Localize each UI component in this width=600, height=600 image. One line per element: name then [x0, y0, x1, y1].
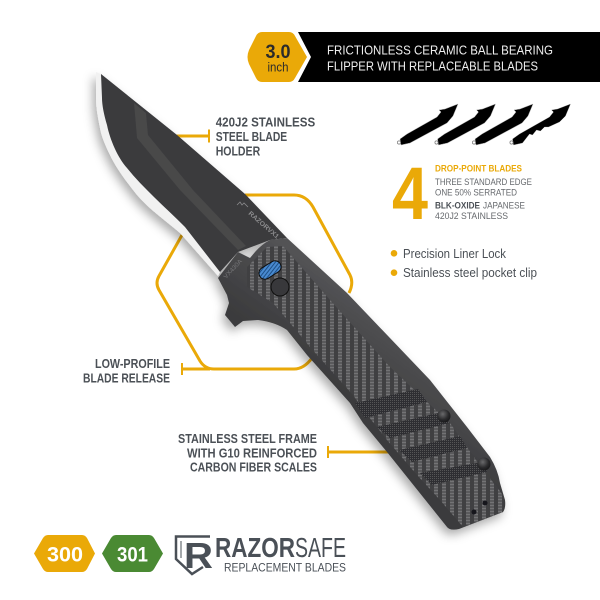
- replacement blade icons: [397, 104, 570, 145]
- label: blade holder: 420J2 STAINLESS: [216, 116, 315, 130]
- feature bullet: pocket clip: Stainless steel pocket clip: [403, 266, 537, 280]
- size badge: 3.0 inch: 3.0: [266, 41, 291, 63]
- blade specification text: 420J2 STAINLESS: [435, 211, 508, 221]
- label: blade release: [83, 357, 170, 386]
- label: frame and scales: STAINLESS STEEL FRAME: [178, 432, 317, 446]
- blade bevel: [134, 103, 246, 250]
- blade specification text: BLK-OXIDE: [435, 201, 480, 211]
- blade white edge: [96, 72, 222, 276]
- badge: 301: 301: [117, 544, 148, 566]
- blade: [101, 74, 287, 272]
- size badge: 3.0 inch: inch: [268, 60, 289, 74]
- handle: [218, 238, 505, 530]
- label: blade holder: HOLDER: [216, 144, 260, 158]
- logo wordmark: RAZOR: [215, 532, 295, 563]
- callout line: frame: [328, 446, 390, 458]
- callout line: blade holder: [175, 130, 209, 142]
- label: blade holder: [216, 116, 315, 158]
- gold hexagon callout: blade release: [157, 195, 352, 375]
- blade icon 2: [435, 104, 496, 145]
- blade logo mark: [237, 202, 248, 207]
- frame screws: [438, 410, 490, 470]
- blade specification text: ONE 50% SERRATED: [435, 188, 517, 198]
- blade specification text: [435, 164, 532, 221]
- carbon fiber scale: [247, 246, 504, 527]
- badge: 301: [102, 535, 163, 572]
- label: frame and scales: CARBON FIBER SCALES: [190, 461, 317, 475]
- header banner: FRICTIONLESS CERAMIC BALL BEARING: [327, 42, 553, 58]
- blade specification text: THREE STANDARD EDGE: [435, 177, 532, 187]
- label: blade release: BLADE RELEASE: [83, 372, 170, 386]
- big number 4: 4: [392, 152, 428, 235]
- lanyard holes: [472, 500, 488, 514]
- size badge: 3.0 inch: [248, 32, 307, 82]
- badge: 300: 300: [47, 544, 83, 566]
- knife: [96, 72, 505, 530]
- RazorSafe logo: [176, 532, 346, 576]
- flipper tab: [257, 259, 283, 281]
- header banner: [298, 32, 600, 82]
- blade specification text: DROP-POINT BLADES: [435, 164, 522, 174]
- pivot screw: [271, 278, 289, 296]
- blade icon 3: [472, 104, 533, 145]
- badge: 300: [34, 535, 95, 572]
- grip grooves: [355, 389, 487, 485]
- blade logo: RAZORVX1: [247, 210, 280, 241]
- label: frame and scales: [178, 432, 317, 475]
- label: frame and scales: WITH G10 REINFORCED: [187, 447, 317, 461]
- blade icon 1: [397, 104, 458, 145]
- logo tagline: REPLACEMENT BLADES: [224, 563, 346, 575]
- blade icon 4: serrated: [510, 104, 570, 145]
- label: blade release: LOW-PROFILE: [95, 357, 170, 371]
- blade specification text: JAPANESE: [483, 201, 525, 211]
- label: blade holder: STEEL BLADE: [216, 130, 287, 144]
- RazorSafe logo: SAFE: [295, 532, 346, 563]
- header banner: FLIPPER WITH REPLACEABLE BLADES: [327, 59, 538, 74]
- blade model number: VX430A: [223, 259, 244, 280]
- feature bullet: liner lock: Precision Liner Lock: [403, 247, 507, 261]
- logo shield: R: [184, 535, 213, 576]
